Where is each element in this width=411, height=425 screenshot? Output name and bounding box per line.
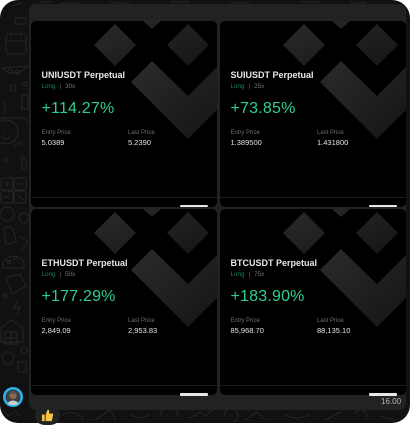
profit percent: +73.85% [230,100,296,117]
reaction pill: thumbs up [35,406,60,425]
profit percent: +114.27% [42,100,114,117]
last price: 5.2390 [128,138,151,147]
last price: 2,953.83 [128,326,157,335]
pair title: SUIUSDT Perpetual [230,70,314,80]
card: BTCUSDT [220,209,406,395]
white bar: card 3 [180,393,208,396]
card: UNIUSDT [31,21,217,207]
position side and leverage: Long | 75x [230,271,264,278]
binance logo watermark [283,21,406,139]
entry price label: Entry Price [42,318,71,324]
pair title: BTCUSDT Perpetual [230,258,317,268]
entry price: 5.0389 [42,138,64,147]
profit percent: +183.90% [230,288,305,305]
entry price label: Entry Price [42,130,71,136]
entry price label: Entry Price [230,130,260,136]
last price label: Last Price [317,318,344,324]
icon: avatar [3,387,23,407]
last price: 88,135.10 [317,326,350,335]
binance logo watermark [94,209,217,327]
pair title: ETHUSDT Perpetual [42,258,128,268]
card: SUIUSDT [220,21,406,207]
entry price label: Entry Price [230,318,260,324]
icon: thumbs up [42,410,54,422]
footer line [220,197,406,198]
entry price: 1.389500 [230,138,262,147]
position side and leverage: Long | 25x [230,83,264,90]
last price label: Last Price [128,130,155,136]
footer line [31,385,217,386]
last price: 1.431800 [317,138,348,147]
white bar: card 2 [369,204,397,207]
last price label: Last Price [128,318,155,324]
entry price: 2,849.09 [42,326,71,335]
position side and leverage: Long | 50x [42,271,75,278]
entry price: 85,968.70 [230,326,264,335]
profit percent: +177.29% [42,288,116,305]
binance logo watermark [283,209,406,327]
position side and leverage: Long | 30x [42,83,75,90]
last price label: Last Price [317,130,344,136]
timestamp: 16.00 [381,397,401,406]
pair title: UNIUSDT Perpetual [42,70,125,80]
white bar: card 4 [369,393,397,396]
card: ETHUSDT [31,209,217,395]
footer line [220,385,406,386]
white bar: card 1 [180,204,208,207]
binance logo watermark [94,21,217,139]
footer line [31,197,217,198]
